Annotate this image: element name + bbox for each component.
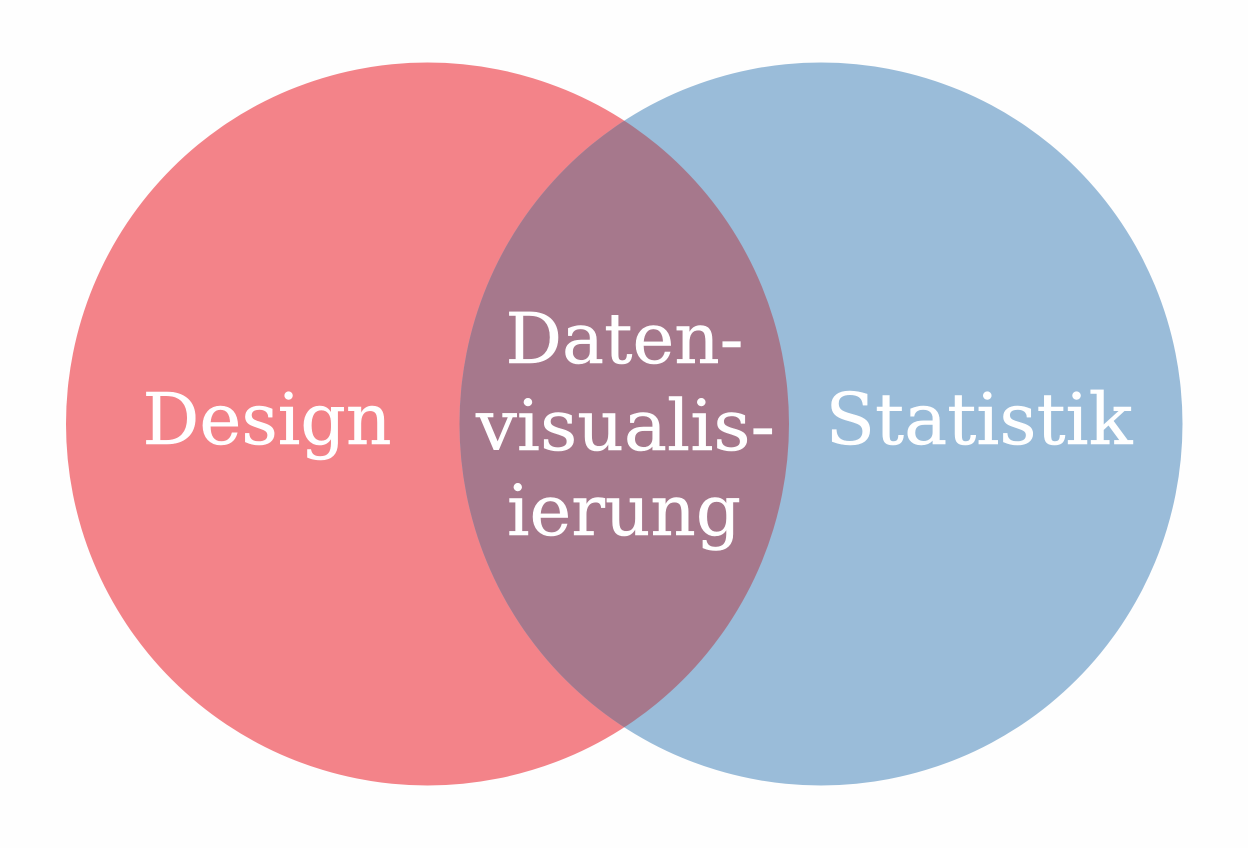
label: Datenvisualisierung: ierung [507, 470, 741, 552]
overlap region [460, 120, 789, 728]
label: Datenvisualisierung: visualis- [475, 385, 775, 467]
label: Statistik: Statistik [826, 378, 1133, 461]
circle: Statistik [460, 62, 1182, 786]
label: Datenvisualisierung [475, 298, 775, 552]
label: Datenvisualisierung: Daten- [506, 298, 744, 380]
circle: Design [66, 62, 789, 786]
venn diagram [66, 62, 1182, 786]
label: Design: Design [142, 378, 392, 461]
